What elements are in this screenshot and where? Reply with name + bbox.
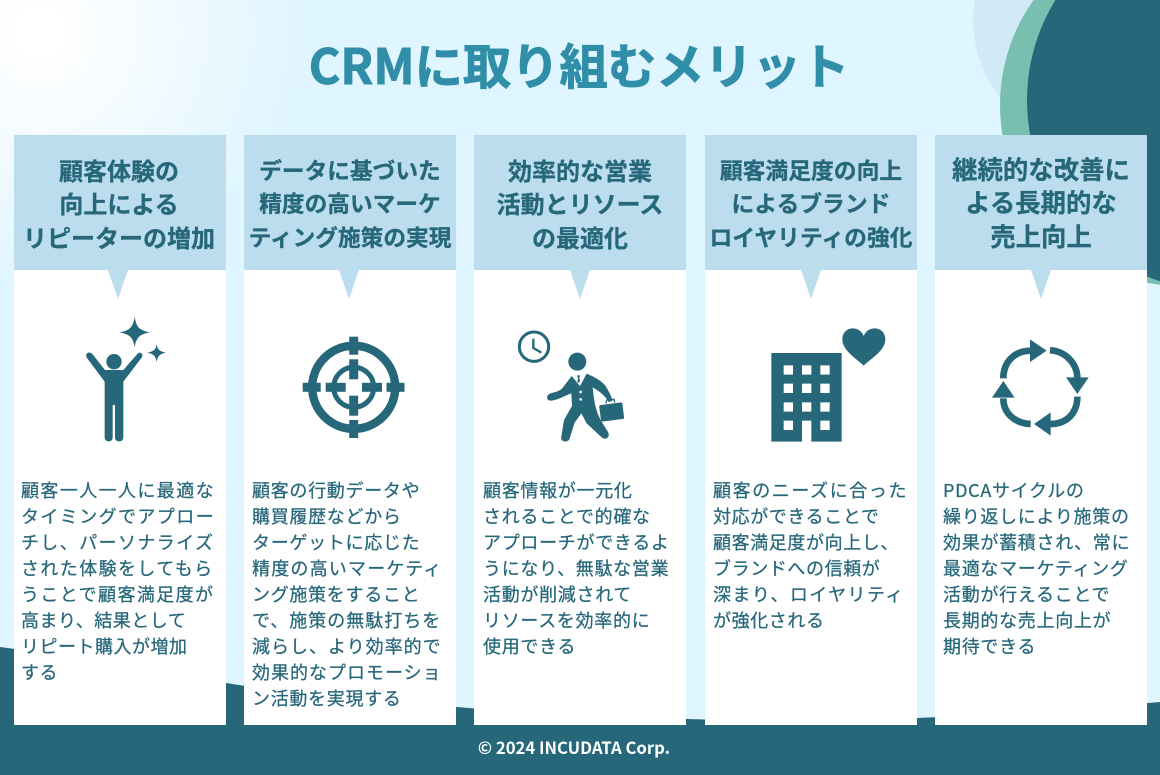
text: efficient sales: 活動が削減されて	[483, 581, 632, 607]
footer copyright: © 2024 INCUDATA Corp.	[478, 735, 670, 759]
text: long-term sales: 効果が蓄積され、常に	[943, 529, 1130, 555]
text: brand loyalty: 深まり、ロイヤリティ	[713, 581, 905, 607]
text: brand loyalty: 顧客満足度が向上し、	[713, 529, 899, 555]
text: long-term sales: PDCAサイクルの	[943, 477, 1085, 503]
panel heading: brand loyalty: ロイヤリティの強化	[709, 220, 913, 252]
text: long-term sales	[943, 477, 1130, 659]
panel heading: efficient sales: 活動とリソース	[497, 185, 663, 220]
pointer triangle	[570, 270, 590, 299]
text: brand loyalty: ブランドへの信頼が	[713, 555, 880, 581]
panel heading: brand loyalty: によるブランド	[732, 186, 890, 219]
text: repeat customers: された体験をしてもら	[21, 555, 214, 581]
text: efficient sales: うになり、無駄な営業	[483, 555, 669, 581]
pointer triangle	[801, 270, 821, 299]
text: precision marketing: 顧客の行動データや	[252, 477, 420, 503]
text: brand loyalty	[713, 477, 908, 633]
text: brand loyalty: が強化される	[713, 607, 825, 633]
text: brand loyalty: 対応ができることで	[713, 503, 880, 529]
text: brand loyalty: 顧客のニーズに合った	[713, 477, 908, 503]
panel heading: precision marketing: データに基づいた	[259, 152, 441, 186]
icon: target crosshair	[302, 336, 404, 438]
text: long-term sales: 期待できる	[943, 633, 1036, 659]
text: efficient sales	[483, 477, 670, 659]
text: repeat customers: タイミングでアプロー	[21, 503, 215, 529]
panel heading: repeat customers: 顧客体験の	[59, 152, 179, 186]
text: repeat customers: うことで顧客満足度が	[21, 581, 214, 607]
panel: repeat customers	[14, 135, 226, 725]
panel heading: efficient sales	[474, 135, 686, 270]
panel heading: efficient sales: 効率的な営業	[508, 152, 652, 186]
text: repeat customers: 顧客一人一人に最適な	[21, 477, 215, 503]
panel heading: precision marketing: 精度の高いマーケ	[259, 186, 441, 219]
text: repeat customers: 高まり、結果として	[21, 607, 186, 633]
panel heading: efficient sales: の最適化	[532, 218, 628, 254]
panel heading: long-term sales: 売上向上	[990, 218, 1092, 254]
text: precision marketing: 効果的なプロモーショ	[252, 659, 442, 685]
panel: brand loyalty	[705, 135, 917, 725]
text: efficient sales: 使用できる	[483, 633, 576, 659]
text: precision marketing: 減らし、より効率的で	[252, 633, 442, 659]
text: precision marketing	[252, 477, 443, 711]
text: repeat customers: する	[21, 659, 58, 685]
panel: efficient sales	[474, 135, 686, 725]
panel heading: long-term sales: 継続的な改善に	[952, 150, 1130, 186]
text: efficient sales: リソースを効率的に	[483, 607, 650, 633]
pointer triangle	[339, 270, 359, 299]
text: long-term sales: 繰り返しにより施策の	[943, 503, 1130, 529]
panel heading: repeat customers	[14, 135, 226, 270]
text: precision marketing: ン活動を実現する	[252, 685, 402, 711]
panel heading: repeat customers: 向上による	[59, 185, 179, 220]
text: repeat customers: チし、パーソナライズ	[21, 529, 214, 555]
text: precision marketing: 購買履歴などから	[252, 503, 402, 529]
icon: businessman with clock	[518, 330, 624, 442]
pointer triangle	[108, 270, 128, 299]
text: precision marketing: で、施策の無駄打ちを	[252, 607, 441, 633]
icon: cycle arrows	[992, 339, 1089, 436]
panel: precision marketing	[244, 135, 456, 725]
text: repeat customers	[21, 477, 215, 685]
panel heading: long-term sales: よる長期的な	[965, 184, 1117, 220]
text: long-term sales: 活動が行えることで	[943, 581, 1110, 607]
panel heading: precision marketing: ティング施策の実現	[249, 220, 451, 252]
text: precision marketing: ターゲットに応じた	[252, 529, 420, 555]
icon: building with heart	[771, 328, 886, 442]
text: precision marketing: 精度の高いマーケティ	[252, 555, 443, 581]
text: efficient sales: されることで的確な	[483, 503, 651, 529]
icon: person with sparkles	[86, 316, 166, 442]
text: repeat customers: リピート購入が増加	[21, 633, 188, 659]
panel: long-term sales	[935, 135, 1147, 725]
text: long-term sales: 長期的な売上向上が	[943, 607, 1111, 633]
title: CRMに取り組むメリット	[309, 28, 849, 98]
text: long-term sales: 最適なマーケティング	[943, 555, 1129, 581]
panel heading: brand loyalty: 顧客満足度の向上	[720, 152, 902, 186]
text: efficient sales: アプローチができるよ	[483, 529, 670, 555]
panel heading: repeat customers: リピーターの増加	[23, 218, 215, 254]
text: precision marketing: ング施策をすること	[252, 581, 420, 607]
pointer triangle	[1031, 270, 1051, 299]
panel heading: brand loyalty	[705, 135, 917, 270]
panel heading: long-term sales	[935, 135, 1147, 270]
text: efficient sales: 顧客情報が一元化	[483, 477, 633, 503]
panel heading: precision marketing	[244, 135, 456, 270]
